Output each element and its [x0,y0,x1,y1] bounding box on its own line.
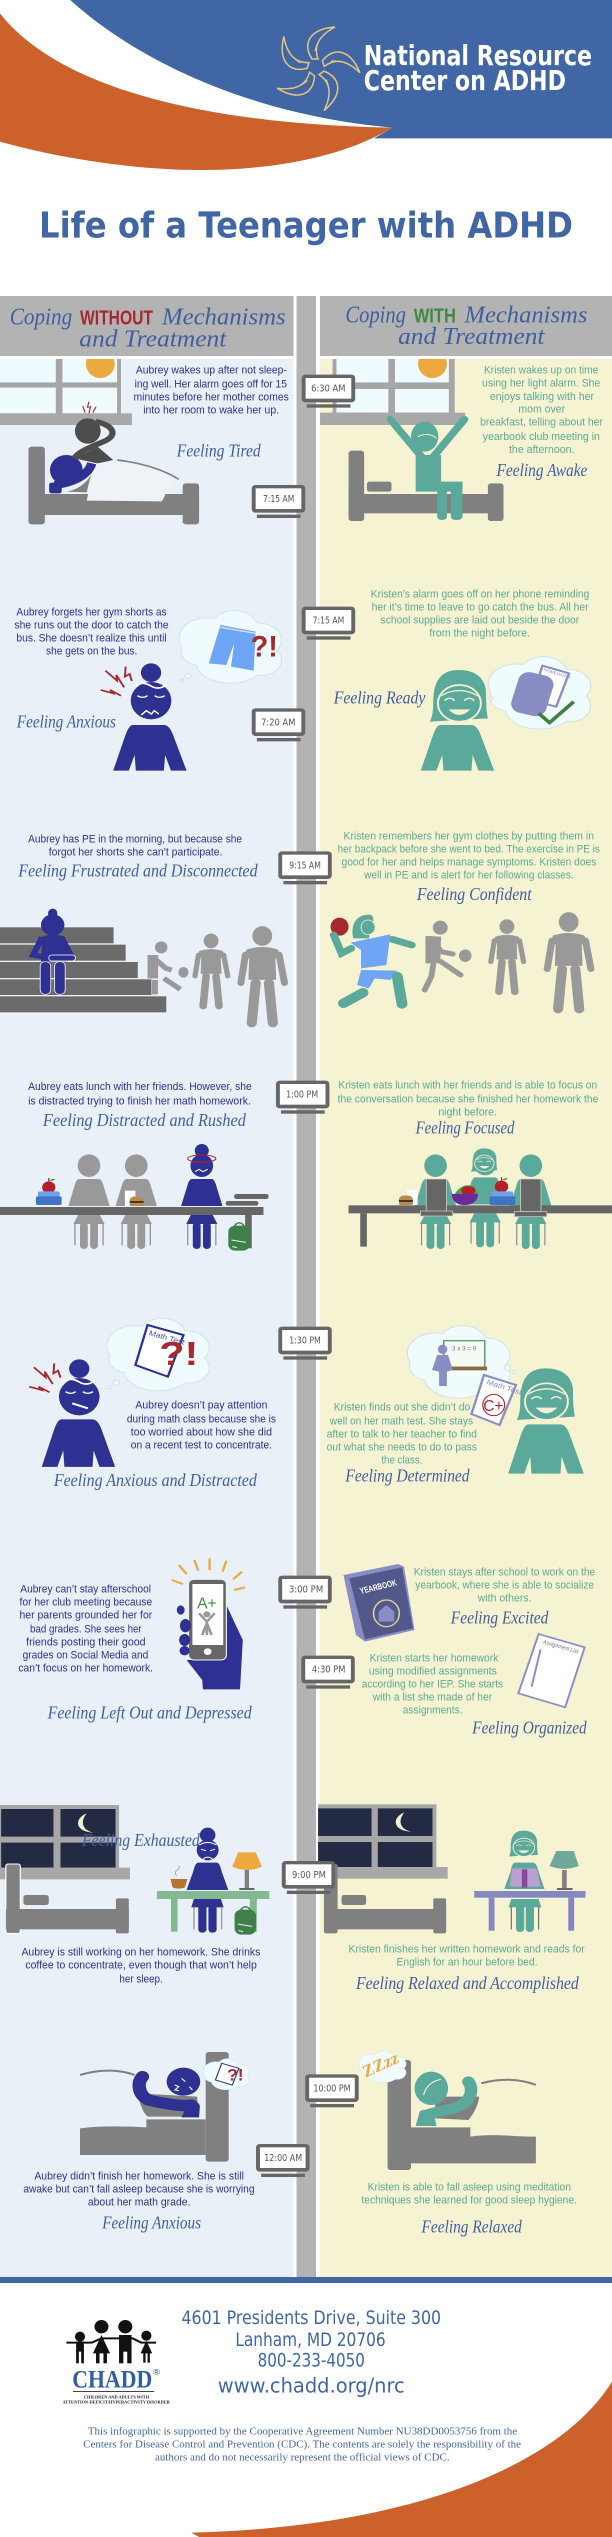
text: Aubrey evening: coffee to concentrate, even though that won’t help [25,1959,257,1971]
icon: yearbook: YEARBOOK [358,1577,398,1596]
heading background: without [0,296,294,356]
contact details [181,2307,441,2398]
clock: 1:00 PM: 1:00 PM [286,1089,318,1100]
text: Aubrey grounded: can’t focus on her homework. [18,1661,153,1674]
night window [0,1805,130,1879]
feeling label: Feeling Left Out and Depressed [47,1704,252,1723]
feeling label: Feeling Distracted and Rushed [42,1111,246,1131]
text: Aubrey grounded: friends posting their good [26,1635,146,1648]
classmates playing [425,912,591,1009]
panel: Aubrey grounded [18,1558,252,1723]
funding disclaimer: This infographic is supported by the Cooperative Agreement Number NU38DD0053756 from the [88,2425,517,2437]
panel: Kristen at PE [331,829,600,1009]
clock: 7:15 AM left: 7:15 AM [263,494,294,505]
Aubrey sitting up in bed [49,418,113,493]
text: Kristen evening: English for an hour before bed. [397,1955,537,1968]
text: Kristen math test: well on her math test. She stays [329,1414,473,1427]
icon: phone in hand [172,1558,245,1689]
thought cloud: forgotten shorts: ?! [251,629,278,663]
heading background: with [320,296,612,356]
lamp [550,1851,579,1890]
clock: 9:00 PM: 9:00 PM [292,1870,326,1881]
desk [157,1891,269,1932]
heading: coping with: WITH [414,304,456,327]
text: Aubrey math class: on a recent test to concentrate. [131,1439,272,1451]
text: Aubrey math class: during math class because she is [127,1413,276,1425]
header banner [0,0,612,170]
icon: gold pinwheel logo [275,27,360,111]
panel: Aubrey forgets shorts [14,606,281,771]
banner orange swoosh [0,13,392,170]
Kristen reading at desk [504,1831,544,1932]
thought cloud: packed backpack [482,657,590,729]
funding disclaimer: authors and do not necessarily represent the official views of CDC. [155,2451,450,2463]
clock: 1:30 PM: 1:30 PM [289,1335,321,1346]
heading: coping without: WITHOUT [80,306,153,329]
clock: 10:00 PM: 10:00 PM [313,2083,350,2094]
text: Aubrey math class: Aubrey doesn’t pay attention [135,1399,267,1411]
heading: coping with [345,300,587,350]
footer [62,2307,612,2537]
text: Aubrey PE [28,832,242,858]
text: Aubrey grounded: bad grades. She sees her [30,1622,142,1635]
heading: coping without: Coping [10,302,72,330]
feeling label: Feeling Tired [176,442,261,461]
feeling label: Feeling Anxious and Distracted [53,1471,257,1491]
panel: Aubrey evening homework [0,1805,269,1985]
contact details: Lanham, MD 20706 [235,2329,386,2351]
feeling label: Feeling Excited [450,1609,549,1628]
icon: phone in hand: A+ [197,1594,217,1612]
text: Kristen homework: according to her IEP. She starts [362,1678,503,1690]
text: Kristen lunch: night before. [438,1105,497,1118]
feeling label: Feeling Frustrated and Disconnected [18,862,258,881]
text: Aubrey math class [127,1399,276,1451]
timeline bar [296,296,316,2277]
heading: coping without: Mechanisms [161,302,286,330]
thought cloud: forgotten shorts [180,611,281,683]
heading: coping without [10,302,286,352]
blanket edge [117,460,179,479]
contact details: 800-233-4050 [258,2349,365,2371]
footer orange swoosh [191,2382,612,2537]
text: Aubrey lunch: is distracted trying to finish her math homework. [28,1094,251,1107]
text: Aubrey evening: her sleep. [119,1972,163,1985]
text: Aubrey forgets shorts: she gets on the bus. [46,645,137,657]
footer rule [0,2277,612,2283]
Aubrey lying awake [139,2068,200,2117]
classmates playing [148,926,285,1023]
bed side view [388,2060,536,2170]
text: Kristen homework [362,1652,503,1716]
clock: 4:30 PM [301,1656,355,1689]
text: Kristen yearbook [414,1565,595,1604]
clock: 7:20 AM [252,708,305,741]
text: Aubrey forgets shorts: Aubrey forgets her gym shorts as [16,606,167,618]
feeling label: Feeling Focused [415,1119,515,1138]
lunch items [399,1177,515,1205]
graded test paper: C+ [483,1396,503,1415]
text: Kristen math test: out what she needs to do to pass [327,1440,477,1453]
thought cloud: math test: ?! [159,1335,198,1372]
text: Kristen alarm [371,588,589,639]
feeling label: Feeling Determined [345,1467,470,1486]
text: Kristen homework: Kristen starts her homework [370,1652,499,1664]
Kristen and friends at table [415,1148,552,1249]
clock: 7:15 AM left [252,485,305,518]
clock: 9:00 PM [282,1861,335,1894]
Aubrey anxious [101,663,187,771]
organisation name [364,40,592,97]
clock: 12:00 AM: 12:00 AM [264,2153,302,2164]
thought cloud: math test: Math Test [148,1329,187,1347]
bed [324,1864,446,1933]
text: Kristen wakes up: mom over [518,403,565,415]
heading: coping with: Mechanisms [464,300,587,328]
clock: 3:00 PM [278,1576,332,1609]
panel: Kristen asleep [357,2049,577,2237]
text: Aubrey wakes up: minutes before her mother comes [133,391,289,403]
panel: Kristen at lunch [338,1078,612,1249]
Kristen ready [421,670,494,771]
chairs [420,1179,547,1217]
Kristen sleeping [415,2072,471,2126]
text: Aubrey wakes up: Aubrey wakes up after not sleep- [136,363,287,376]
text: Aubrey PE: forgot her shorts she can’t participate. [49,846,222,858]
clock: 7:15 AM right [302,607,355,640]
text: Aubrey lunch [28,1080,252,1107]
icon: assignment list: Assignment List [542,1639,579,1655]
CHADD logo: ATTENTION-DEFICIT/HYPERACTIVITY DISORDER [62,2401,170,2405]
CHADD logo: CHILDREN AND ADULTS WITH [84,2396,149,2400]
funding disclaimer [83,2425,521,2463]
text: Aubrey grounded: for her club meeting because [20,1595,152,1608]
panel: Kristen ready for bus [333,588,590,771]
clock: 7:20 AM: 7:20 AM [261,717,295,728]
lunch items [36,1178,269,1206]
clock: 1:00 PM [276,1081,329,1114]
CHADD logo: ® [153,2368,161,2377]
text: Aubrey grounded [18,1582,153,1674]
graded test paper [471,1375,524,1425]
feeling label: Feeling Confident [416,885,532,905]
text: Aubrey wakes up: into her room to wake her up. [143,403,279,416]
text: Aubrey wakes up: ing well. Her alarm goes off for 15 [135,377,287,390]
panel: Aubrey wakes up [0,359,289,524]
table [0,1207,263,1248]
text: Aubrey grounded: her parents grounded her for [20,1608,152,1621]
clock: 4:30 PM: 4:30 PM [312,1664,345,1675]
thought cloud: teacher at board: 3 x 3 = 9 [452,1346,477,1353]
panel: Kristen homework list [362,1634,587,1738]
feeling label: Feeling Anxious [16,713,116,732]
contact details: 4601 Presidents Drive, Suite 300 [181,2307,441,2329]
text: Kristen lunch [338,1078,598,1118]
backpack [228,1223,250,1251]
icon: assignment list [518,1634,585,1707]
text: Kristen asleep [361,2181,577,2206]
window with sun [320,359,465,425]
clock: 7:15 AM right: 7:15 AM [313,615,344,626]
clock: 3:00 PM: 3:00 PM [289,1584,323,1595]
text: Kristen math test: Kristen finds out she didn’t do [334,1401,470,1413]
panel: right column background [320,359,612,2277]
thought cloud: packed backpack: HOMEWORK [543,667,572,680]
Kristen stretching [390,419,464,520]
text: Aubrey midnight: Aubrey didn’t finish her homework. She is still [34,2169,244,2182]
text: Kristen alarm: from the night before. [429,627,530,639]
text: Aubrey midnight: awake but can’t fall asleep because she is worrying [23,2183,255,2195]
bleachers [0,927,166,1012]
Kristen smiling [508,1368,584,1474]
Aubrey at desk [187,1828,228,1933]
heading: coping with: and Treatment [398,322,545,350]
text: Kristen homework: using modified assignments [369,1665,497,1677]
Kristen throwing ball [331,915,412,1004]
Aubrey sitting on bleachers [33,909,75,994]
clock: 6:30 AM: 6:30 AM [311,383,345,394]
panel: Aubrey awake at midnight [23,2052,255,2233]
text: Aubrey grounded: grades on Social Media and [23,1648,148,1661]
bed [6,1864,129,1933]
CHADD logo [62,2320,170,2405]
thought cloud: teacher at board [408,1326,516,1398]
text: Aubrey midnight: about her math grade. [88,2196,190,2208]
text: Aubrey forgets shorts: bus. She doesn’t realize this until [16,632,167,644]
night window [318,1804,448,1879]
text: Kristen yearbook: with others. [477,1592,532,1604]
thought cloud: sleeping: ZZzz [357,2049,403,2081]
desk [474,1891,585,1931]
feeling label: Feeling Anxious [101,2214,201,2233]
icon: yearbook [343,1564,415,1642]
thought cloud: math test [107,1319,209,1390]
text: Kristen wakes up [480,363,603,456]
heading: coping with: Coping [345,300,406,328]
thought cloud: math grade: ?! [227,2066,244,2084]
icon: red stress marks [83,402,96,413]
graded test paper: Math Test [485,1378,524,1397]
text: Kristen homework: with a list she made of her [372,1691,492,1703]
text: Aubrey math class: too worried about how she did [131,1426,272,1438]
panel: Aubrey at lunch [0,1080,269,1251]
friends at table [68,1154,157,1249]
text: Aubrey forgets shorts [14,606,169,657]
Aubrey at table [181,1144,222,1249]
text: Aubrey PE: Aubrey has PE in the morning, but because she [28,832,242,845]
clock: 6:30 AM [302,375,355,408]
text: Kristen math test: after to talk to her teacher to find [327,1427,477,1440]
text: Kristen wakes up: the afternoon. [509,443,575,456]
text: Aubrey forgets shorts: she runs out the door to catch the [14,618,169,631]
text: Aubrey evening: Aubrey is still working on her homework. She drinks [21,1946,260,1958]
banner blue shape [70,0,612,138]
text: Kristen math test [327,1401,477,1466]
backpack [235,1907,256,1935]
bed side view [80,2052,229,2162]
panel: Kristen evening reading [318,1804,585,1994]
heading: coping without: and Treatment [79,325,227,352]
clock: 1:30 PM [278,1327,332,1360]
clock: 9:15 AM: 9:15 AM [289,860,321,871]
panel: Kristen wakes up [320,359,603,521]
clock: 12:00 AM [256,2144,310,2177]
clock: 10:00 PM [305,2074,359,2107]
text: Kristen homework: assignments. [403,1704,463,1716]
blanket [87,460,179,501]
panel: Kristen yearbook [343,1564,595,1642]
table [349,1205,612,1247]
funding disclaimer: Centers for Disease Control and Prevention (CDC). The contents are solely the responsibility of the [83,2438,521,2450]
feeling label: Feeling Ready [333,689,426,708]
text: Aubrey midnight [23,2169,255,2208]
text: Aubrey evening [21,1946,260,1985]
text: Kristen math test: the class. [381,1453,422,1466]
panel: Aubrey in math class [29,1319,276,1491]
contact details: www.chadd.org/nrc [218,2374,405,2398]
text: Kristen PE [338,829,600,881]
panel: Kristen talks to teacher [327,1326,584,1486]
text: Aubrey wakes up [133,363,289,416]
bed [28,447,199,524]
feeling label: Feeling Exhausted [81,1831,200,1851]
bed [349,451,503,521]
Aubrey worried [29,1359,115,1467]
feeling label: Feeling Relaxed [421,2218,522,2237]
panel: Aubrey at PE [0,832,285,1023]
coffee cup [171,1866,187,1889]
thought cloud: math grade [204,2059,248,2090]
text: Kristen evening [349,1942,585,1968]
text: Aubrey grounded: Aubrey can’t stay afterschool [20,1582,151,1595]
text: Aubrey lunch: Aubrey eats lunch with her friends. However, she [28,1080,252,1093]
lamp [232,1852,262,1890]
clock: 9:15 AM [278,851,332,884]
panel: left column background [0,359,294,2277]
window with sun [0,359,132,425]
CHADD logo: CHADD [72,2364,152,2393]
